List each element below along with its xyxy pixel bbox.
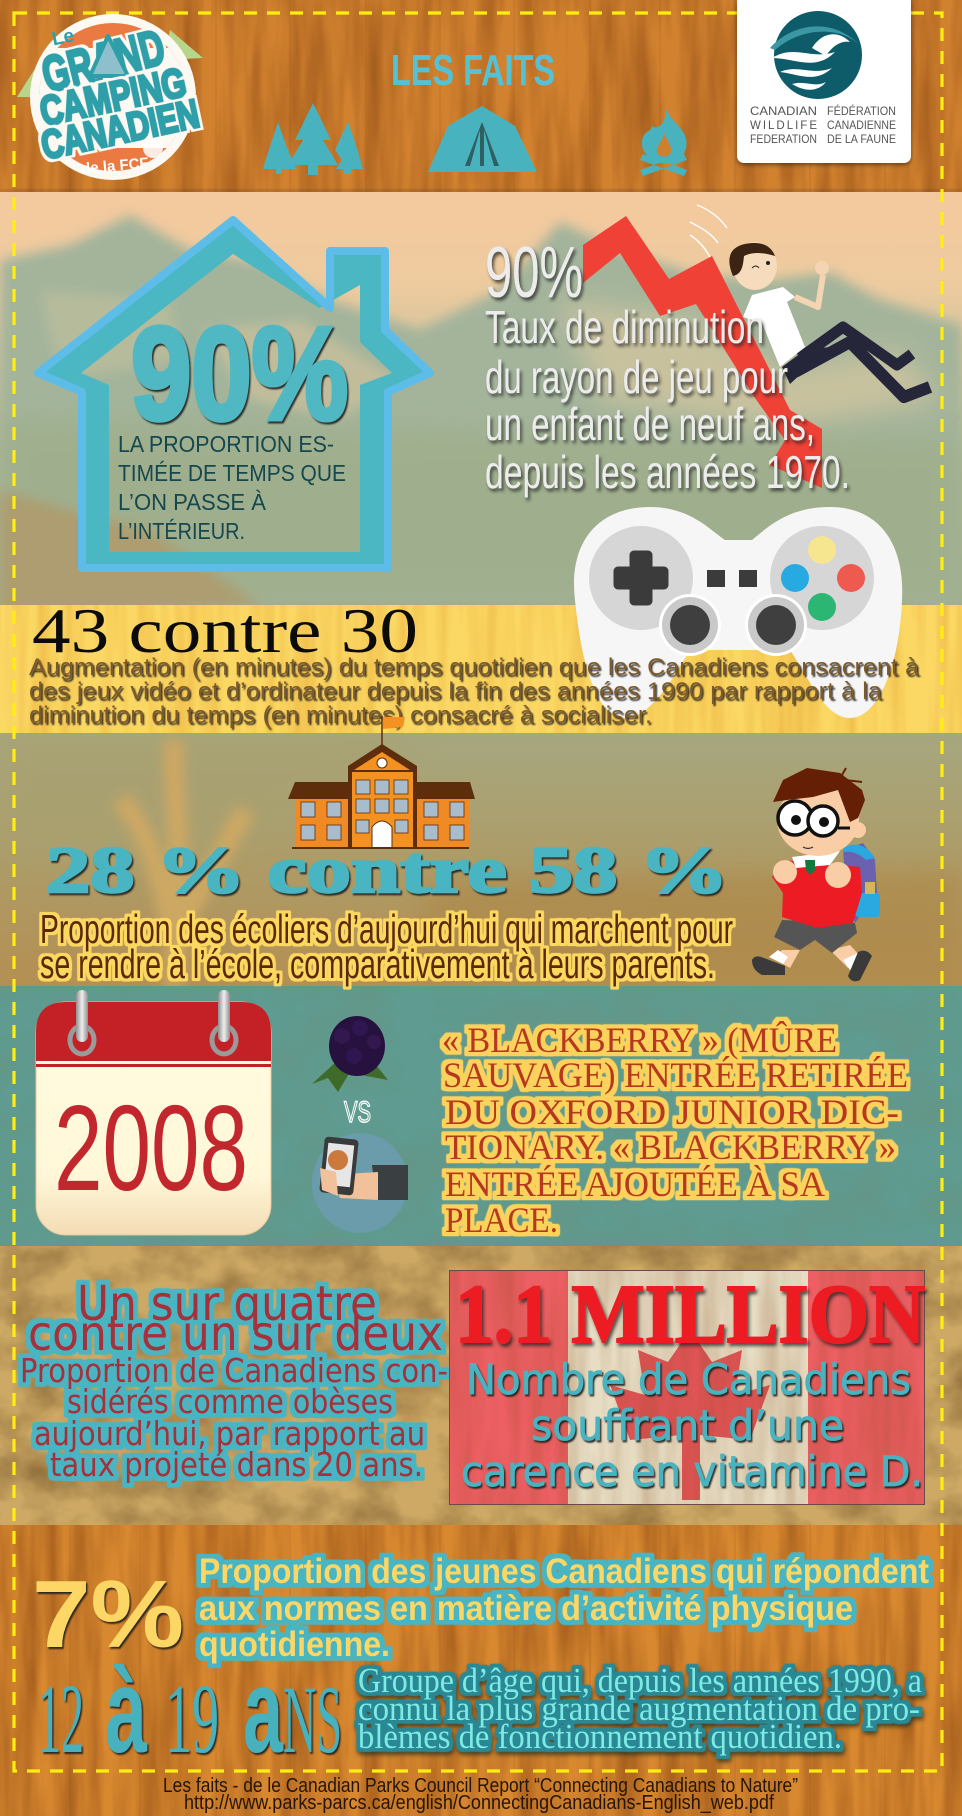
- description: blackberry entry: ENTRÉE AJOUTÉE À SA: [445, 1164, 825, 1204]
- logo: Le Grand Camping Canadien: CANADIEN: [37, 92, 203, 168]
- statistic text: 90% decrease: [485, 233, 850, 498]
- panel: Canadian flag: [449, 1268, 925, 1505]
- logo: Le Grand Camping Canadien: [17, 14, 210, 180]
- panel: golden forest background: [0, 1246, 962, 1525]
- source credit: http://www.parks-parcs.ca/english/ConnectingCanadians-English_web.pdf: [184, 1792, 774, 1814]
- description: vitamin D: Nombre de Canadiens: [466, 1355, 911, 1404]
- description: vitamin D: [461, 1355, 923, 1496]
- icon: blackberry fruit: [312, 1016, 388, 1092]
- source credit: Les faits - de le Canadian Parks Council Report “Connecting Canadians to Nature”: [163, 1775, 798, 1797]
- icon: house: [38, 220, 430, 568]
- logo: Le Grand Camping Canadien: de la FCF: [81, 155, 149, 177]
- house caption: L’INTÉRIEUR.: [118, 518, 245, 544]
- description: age group: [358, 1661, 922, 1756]
- big number 90%: 90%: [131, 300, 348, 447]
- description: age group: blèmes de fonctionnement quotidien.: [358, 1717, 842, 1756]
- panel: footer wood band: [0, 1525, 962, 1816]
- description: age group: connu la plus grande augmentation de pro-: [358, 1689, 920, 1728]
- statistic: 1.1 MILLION: 1.1 MILLION: [455, 1268, 925, 1361]
- statistic text: 90% decrease: du rayon de jeu pour: [485, 351, 788, 403]
- icon: calendar showing 2008: 2008: [54, 1080, 248, 1216]
- statistic text: 90% decrease: un enfant de neuf ans,: [485, 398, 815, 450]
- logo card: Canadian Wildlife Federation: FÉDÉRATION: [827, 105, 896, 118]
- statistic: 12 à 19 ans: 19: [165, 1663, 219, 1774]
- panel: header wood band: [0, 0, 962, 196]
- statistic: un sur quatre contre un sur deux: Proportion de Canadiens con-: [20, 1351, 448, 1390]
- logo card: Canadian Wildlife Federation: FEDERATION: [750, 134, 817, 146]
- label: VS: VS: [344, 1096, 371, 1129]
- description: age group: Groupe d’âge qui, depuis les années 1990, a: [358, 1661, 922, 1700]
- statistic: 7%: 7%: [32, 1561, 184, 1668]
- logo: Le Grand Camping Canadien: GRAND: [36, 19, 170, 103]
- statistic: 12 à 19 ans: a: [243, 1644, 284, 1778]
- logo: Le Grand Camping Canadien: CAMPING: [36, 58, 190, 135]
- logo card: Canadian Wildlife Federation: [737, 0, 911, 163]
- description: blackberry entry: DU OXFORD JUNIOR DIC-: [445, 1092, 899, 1132]
- statistic: 43 contre 30: 43 contre 30: [32, 596, 418, 666]
- description: walking to school: [40, 906, 733, 987]
- statistic: un sur quatre contre un sur deux: aujourd’hui, par rapport au: [34, 1414, 425, 1453]
- house caption: TIMÉE DE TEMPS QUE: [118, 460, 346, 486]
- logo card: Canadian Wildlife Federation: CANADIENNE: [827, 120, 896, 132]
- statistic: 28 % contre 58 %: 28 % contre 58 %: [46, 834, 728, 907]
- statistic: 12 à 19 ans: 12: [38, 1663, 84, 1774]
- logo card: Canadian Wildlife Federation: CANADIAN: [750, 106, 817, 118]
- panel: school walking background: [0, 733, 962, 986]
- title: Les faits: LES FAITS: [391, 46, 555, 95]
- infographic page: NS: [283, 1666, 342, 1773]
- statistic: 12 à 19 ans: [38, 1644, 342, 1778]
- statistic text: 90% decrease: Taux de diminution: [485, 301, 764, 353]
- description: physical activity: quotidienne.: [199, 1625, 390, 1664]
- icon: school: [288, 716, 475, 849]
- icon: calendar showing 2008: [36, 990, 271, 1235]
- house caption: [118, 431, 346, 544]
- description: blackberry entry: PLACE.: [445, 1200, 558, 1240]
- description: vitamin D: souffrant d’une: [531, 1401, 844, 1450]
- description: blackberry entry: [442, 1020, 908, 1240]
- description: vitamin D: carence en vitamine D.: [461, 1447, 923, 1496]
- illustration: schoolboy: [752, 768, 880, 981]
- description: video game time: des jeux vidéo et d’ordinateur depuis la fin des années 1990 par rapport à la: [29, 678, 882, 705]
- description: physical activity: aux normes en matière d’activité physique: [199, 1589, 853, 1628]
- logo card: Canadian Wildlife Federation: DE LA FAUNE: [827, 134, 896, 146]
- game controller: [574, 507, 902, 718]
- falling red arrow: [583, 216, 822, 488]
- logo card: Canadian Wildlife Federation: WILDLIFE: [750, 120, 817, 132]
- icon: trees: [263, 103, 363, 175]
- description: blackberry entry: TIONARY. « BLACKBERRY »: [445, 1127, 896, 1167]
- description: physical activity: [199, 1552, 929, 1664]
- statistic: un sur quatre contre un sur deux: [20, 1276, 448, 1484]
- statistic: 12 à 19 ans: à: [105, 1644, 148, 1778]
- panel: mountain background with house and falling statistic: [0, 192, 962, 620]
- icon: campfire: [640, 107, 687, 176]
- house caption: L’ON PASSE À: [118, 489, 267, 515]
- statistic: un sur quatre contre un sur deux: taux projeté dans 20 ans.: [50, 1445, 423, 1484]
- description: video game time: diminution du temps (en minutes) consacré à socialiser.: [29, 702, 652, 729]
- description: video game time: Augmentation (en minutes) du temps quotidien que les Canadiens consacrent à: [29, 654, 919, 681]
- house caption: LA PROPORTION ES-: [118, 431, 334, 457]
- house graphic with 90% statistic: [38, 220, 430, 568]
- description: blackberry entry: SAUVAGE) ENTRÉE RETIRÉE: [443, 1055, 908, 1095]
- panel: yellow wood band: [0, 605, 962, 733]
- logo: Le Grand Camping Canadien: Le: [50, 25, 76, 50]
- statistic text: 90% decrease: 90%: [485, 233, 583, 313]
- icon: tent: [428, 106, 537, 172]
- statistic: un sur quatre contre un sur deux: sidérés comme obèses: [67, 1382, 393, 1421]
- description: blackberry entry: « BLACKBERRY » (MÛRE: [442, 1020, 837, 1060]
- statistic: un sur quatre contre un sur deux: Un sur quatre: [77, 1276, 377, 1332]
- icon: hand holding smartphone: [312, 1133, 408, 1233]
- description: video game time: [29, 654, 919, 729]
- source credit: [163, 1775, 798, 1814]
- person falling: [690, 205, 930, 397]
- panel: teal blackberry background: [0, 986, 962, 1246]
- statistic: un sur quatre contre un sur deux: contre un sur deux: [28, 1306, 443, 1362]
